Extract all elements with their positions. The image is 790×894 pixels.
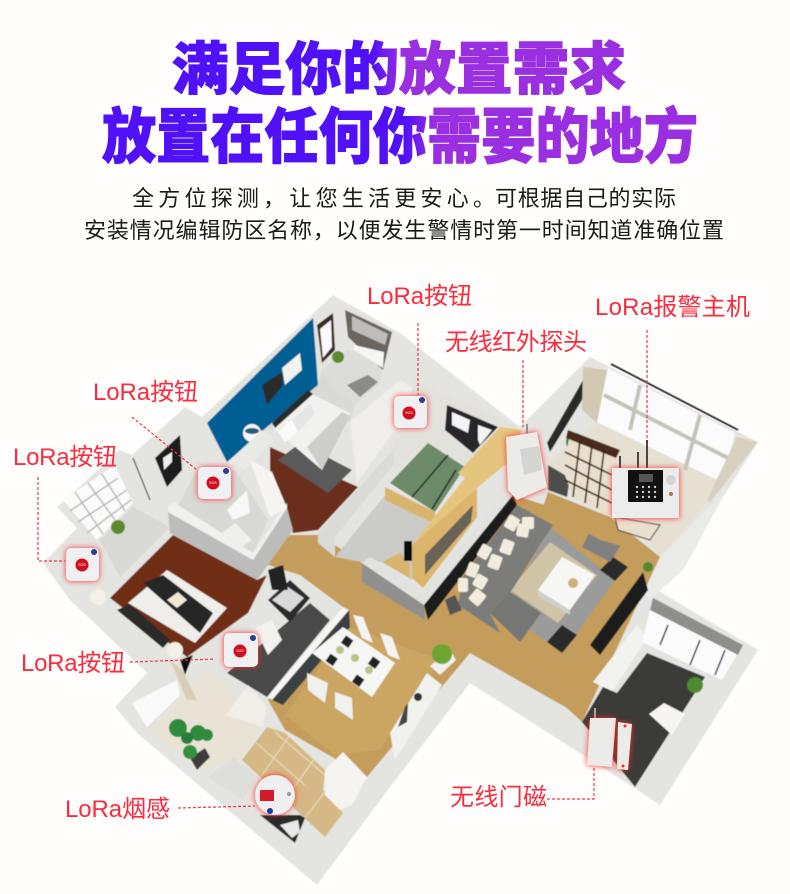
SOS button bathroom [198,467,231,499]
title [102,24,698,176]
main wood floor [262,495,660,777]
blue feature wall [207,318,318,462]
subtitle text: 可根据自己的实际 [495,186,676,211]
wood floor highlight [285,627,440,755]
SOS button bathroom: SOS [209,481,217,485]
right wall strip with tv wall [590,497,723,692]
half wall [362,490,517,620]
hall tiles [242,727,343,837]
title: 放置在任何你需要的地方 [102,89,698,176]
SOS button lower: SOS [236,649,244,653]
window wall [393,380,520,470]
dining table and chairs [307,615,400,720]
subtitle text: 安装情况编辑防区名称，以便发生警情时第一时间知道准确位置 [84,218,724,243]
foyer plant [169,719,213,770]
lower bedroom bed [90,570,227,675]
hall cabinet and shoe rack [208,752,367,843]
upper bedroom rug [278,443,352,493]
label: LoRa button lower: LoRa按钮 [21,650,125,677]
bedroom wall face [267,370,355,430]
lattice screen [563,430,660,540]
title: 满足你的放置需求 [172,24,626,106]
upper bedroom nook [317,310,392,405]
subtitle text: 全方位探测，让您生活更安心。 [132,186,495,211]
foyer [132,660,267,770]
label: wireless infrared detector: 无线红外探头 [445,329,587,356]
lower bathroom tile [227,565,330,697]
floor plan illustration [43,295,758,885]
SOS button top: SOS [405,411,413,415]
SOS button lower [224,633,258,667]
lower bedroom wood floor [110,535,267,657]
ottoman [582,518,626,562]
label: LoRa button top: LoRa按钮 [367,283,472,310]
sunroom [540,357,758,557]
label: LoRa button bathroom: LoRa按钮 [93,379,198,406]
smoke detector [255,775,295,815]
bedside lamp and table [228,424,276,470]
label: LoRa button left: LoRa按钮 [13,444,117,471]
SOS button left [66,548,99,581]
upper bedroom wood floor [270,447,358,533]
label: LoRa smoke detector: LoRa烟感 [65,796,170,823]
left room window and ledge [63,458,170,577]
side table and dining plant [430,595,462,675]
alarm host [612,440,679,518]
SOS button left: SOS [78,563,86,567]
leader lines [38,323,647,808]
tan shelving partition [382,427,522,588]
living room rug [510,527,628,653]
door sensor [587,708,632,770]
lower right room [582,598,743,787]
outer walls [43,295,758,885]
label: LoRa alarm host: LoRa报警主机 [595,294,750,321]
inner bedroom walls and floor [318,380,437,580]
infrared detector [506,424,547,500]
coffee table [538,557,595,615]
white console [390,673,442,760]
upper bed [272,390,350,470]
sofa [458,505,553,642]
tatami bed [385,443,465,524]
artwork on wall [262,353,302,405]
bathroom upper [155,435,293,580]
subtitle text [84,186,724,243]
SOS button top [394,396,427,428]
kitchen divider wall [268,607,350,705]
label: wireless door sensor: 无线门磁 [450,784,547,811]
